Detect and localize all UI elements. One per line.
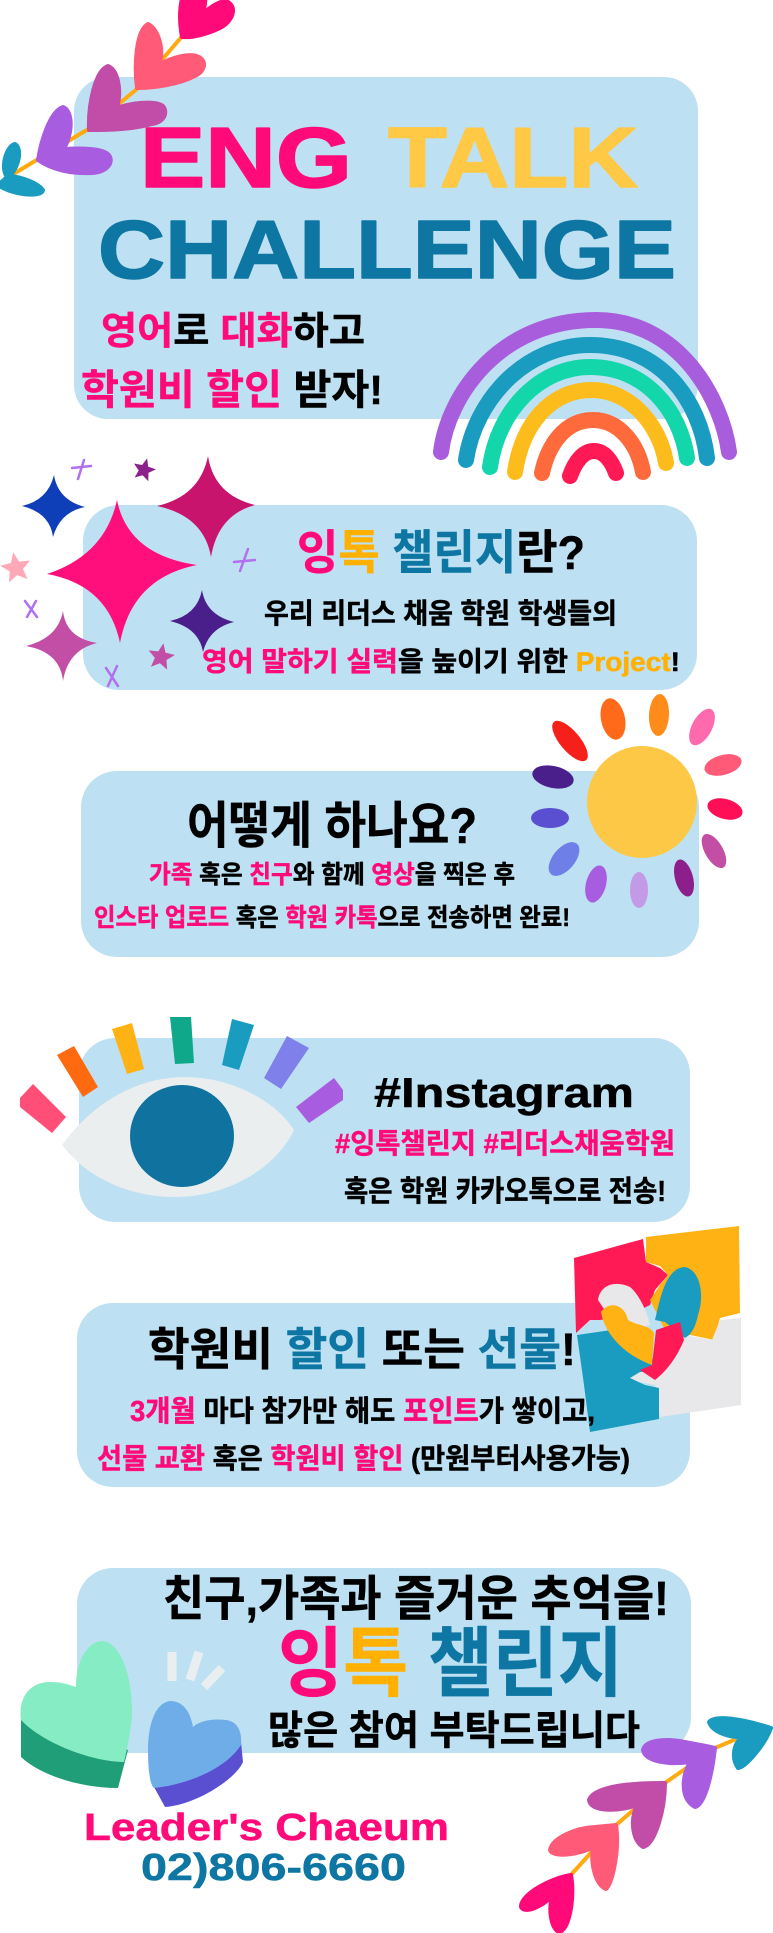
panel: reward [77,1303,690,1487]
text: please join: 많은 참여 부탁드립니다 [268,1709,640,1753]
icon: eye with rainbow lashes [20,1017,343,1197]
heading: how to: 어떻게 하나요? [187,798,477,854]
heading: what is the challenge: 잉톡 챌린지란? [297,526,585,579]
heading: instagram: #Instagram [374,1069,634,1116]
icon: rainbow [441,320,729,476]
text: how to line 2: 인스타 업로드 혹은 학원 카톡으로 전송하면 완료! [94,904,570,932]
text: reward line 2: 선물 교환 혹은 학원비 할인 (만원부터사용가능) [97,1443,630,1474]
text: phone number: 02)806-6660 [141,1847,406,1889]
icon: blue heart [148,1701,243,1807]
heading: eng talk challenge korean: 잉톡 챌린지 [278,1622,623,1707]
text: how to line 1: 가족 혹은 친구와 함께 영상을 찍은 후 [149,861,515,889]
text: hashtags: #잉톡챌린지 #리더스채움학원 [335,1128,675,1159]
text: academy name: Leader's Chaeum [84,1807,449,1849]
text: reward line 1: 3개월 마다 참가만 해도 포인트가 쌓이고, [130,1395,595,1428]
icon: puzzle heart [574,1226,741,1432]
heading: reward: 학원비 할인 또는 선물! [148,1324,576,1375]
panel: what is it [83,505,697,690]
icon: sparkles and stars [0,455,255,686]
title: CHALLENGE: CHALLENGE [98,203,676,296]
icon: mint heart [20,1641,132,1788]
icon: sun [530,694,745,908]
text: description line 1: 우리 리더스 채움 학원 학생들의 [264,598,617,629]
subtitle line 1: 영어로 대화하고 [101,311,365,353]
panel: instagram [79,1038,690,1222]
text: description line 2: 영어 말하기 실력 을 높이기 위한 Project! [202,647,680,677]
icon: bottom-right heart branch [521,1718,771,1932]
heading: fun memories: 친구,가족과 즐거운 추억을! [163,1573,669,1626]
text: kakao: 혹은 학원 카카오톡으로 전송! [344,1175,666,1208]
panel: how to [81,771,699,957]
icon: top-left heart branch [0,0,233,195]
panel: title [74,77,698,419]
icon: shine dashes [172,1652,222,1687]
title: ENG: ENG [140,111,352,206]
panel: closing message [77,1568,691,1753]
title: TALK: TALK [388,111,638,206]
subtitle line 2: 학원비 할인 받자! [81,367,383,413]
